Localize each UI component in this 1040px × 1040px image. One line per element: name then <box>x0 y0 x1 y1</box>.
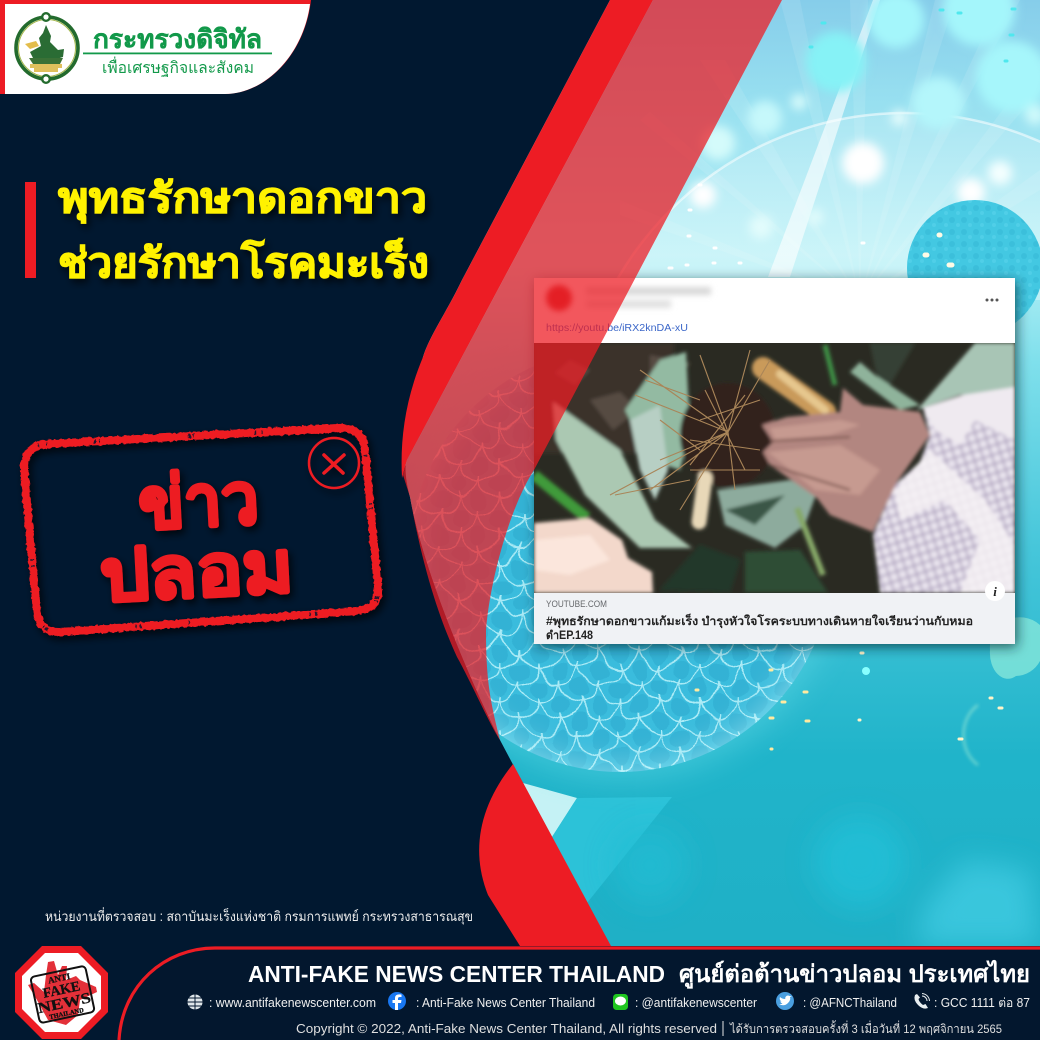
more options icon <box>986 298 998 302</box>
stamp label <box>30 966 95 1023</box>
footer red outline <box>119 948 1040 1040</box>
stamp label: FAKE <box>42 979 82 1002</box>
headline: ช่วยรักษาโรคมะเร็ง <box>58 238 429 286</box>
medical background image <box>380 0 1040 946</box>
twitter handle: : @AFNCThailand <box>803 996 897 1010</box>
phone number: : GCC 1111 ต่อ 87 <box>934 996 1030 1010</box>
icon: globe <box>188 994 202 1010</box>
icon: line <box>613 994 628 1010</box>
footer title: ANTI-FAKE NEWS CENTER THAILAND <box>248 961 665 987</box>
ministry tagline: เพื่อเศรษฐกิจและสังคม <box>102 56 254 77</box>
review date: ได้รับการตรวจสอบครั้งที่ 3 เมื่อวันที่ 12 พฤศจิกายน 2565 <box>729 1020 1002 1036</box>
verification source: หน่วยงานที่ตรวจสอบ : สถาบันมะเร็งแห่งชาติ กรมการแพทย์ กระทรวงสาธารณสุข <box>45 907 473 925</box>
large cancer cell sphere <box>413 372 822 788</box>
source domain: YOUTUBE.COM <box>546 599 607 610</box>
footer thai title: ศูนย์ต่อต้านข่าวปลอม ประเทศไทย <box>679 959 1030 989</box>
stamp text <box>95 457 295 617</box>
anti fake news badge <box>15 946 108 1039</box>
blurred account avatar <box>546 285 572 311</box>
post card screenshot <box>534 278 1015 644</box>
footer bar <box>119 948 1040 1040</box>
red blob lower <box>479 764 611 946</box>
fake news stamp <box>24 428 378 632</box>
ministry logo panel <box>0 0 311 94</box>
stamp text: ปลอม <box>98 527 295 617</box>
stamp label: THAILAND <box>49 1007 85 1021</box>
line handle: : @antifakenewscenter <box>635 996 757 1010</box>
translucent red overlay band <box>403 0 782 740</box>
icon: phone <box>914 994 930 1009</box>
icon: twitter <box>776 992 794 1010</box>
stamp label: NEWS <box>36 990 93 1017</box>
info icon: i <box>993 584 997 599</box>
plant photo <box>534 343 1015 593</box>
icon: ministry emblem <box>16 13 78 83</box>
link text: https://youtu.be/iRX2knDA-xU <box>546 322 688 334</box>
stamp label: ANTI <box>47 971 72 986</box>
copyright: Copyright © 2022, Anti-Fake News Center Thailand, All rights reserved <box>296 1022 717 1036</box>
divider line <box>83 52 272 54</box>
headline <box>58 175 429 286</box>
icon: cross in circle <box>309 438 359 488</box>
red ribbon <box>402 0 653 478</box>
blurred account name <box>586 287 711 308</box>
headline accent bar <box>25 182 36 278</box>
lower glass shapes <box>523 783 577 837</box>
headline: พุทธรักษาดอกขาว <box>58 175 427 224</box>
preview title second line: ดำEP.148 <box>546 628 594 642</box>
info icon <box>985 581 1005 601</box>
preview title: #พุทธรักษาดอกขาวแก้มะเร็ง บำรุงหัวใจโรคระบบทางเดินหายใจเรียนว่านกับหมอ <box>546 613 973 629</box>
stamp text: ข่าว <box>137 459 261 545</box>
icon: facebook <box>388 992 406 1010</box>
website: : www.antifakenewscenter.com <box>209 996 376 1010</box>
separator <box>722 1021 724 1036</box>
stamp frame <box>24 428 378 632</box>
small cell sphere <box>907 200 1040 323</box>
ministry name: กระทรวงดิจิทัล <box>93 24 262 54</box>
facebook name: : Anti-Fake News Center Thailand <box>416 996 595 1010</box>
icon: red hand <box>28 961 97 1025</box>
link preview footer <box>534 593 1015 644</box>
